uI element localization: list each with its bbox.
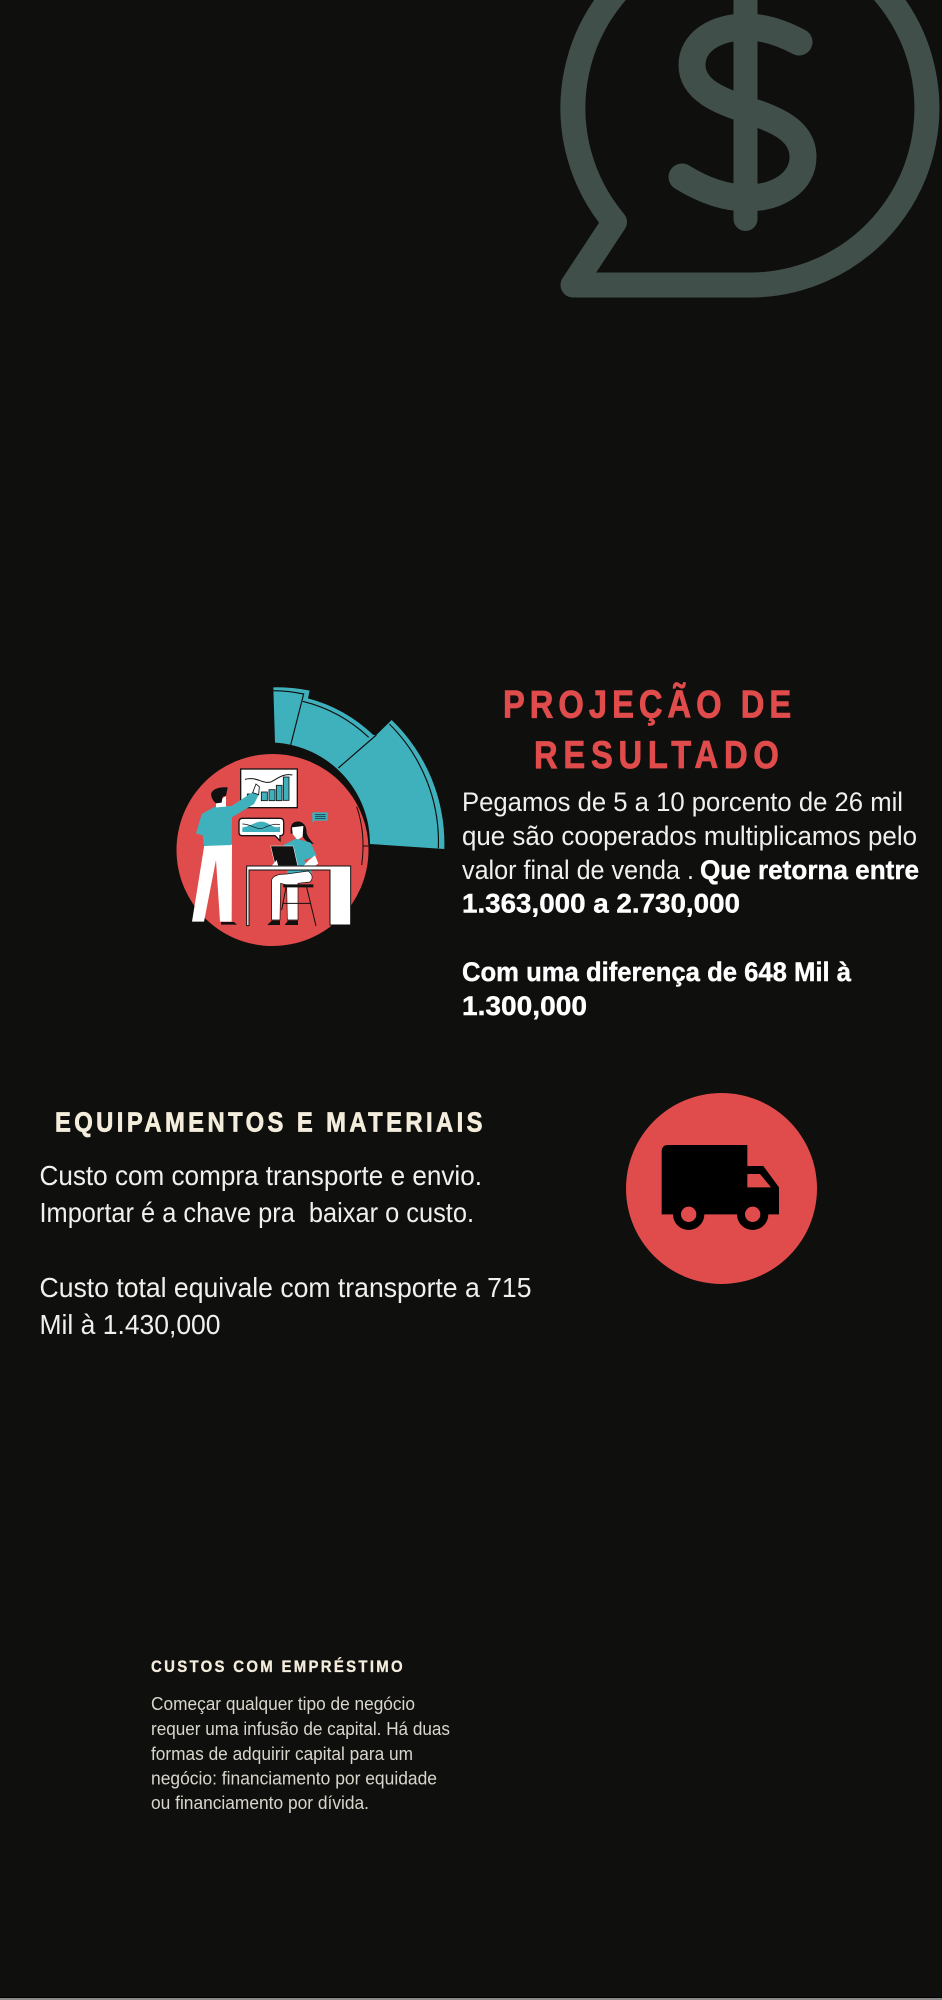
text block: equipment costs: Mil à 1.430,000: [40, 1309, 220, 1340]
chart panel: [241, 769, 297, 808]
text block: projeção description: Com uma diferença de 648 Mil à: [462, 957, 852, 987]
text block: loan costs: formas de adquirir capital para um: [151, 1744, 413, 1764]
icon: speech bubble with dollar sign: [573, 0, 927, 285]
text block: loan costs: Começar qualquer tipo de negócio: [151, 1694, 415, 1714]
text block: equipment costs: Custo total equivale com transporte a 715: [40, 1272, 532, 1303]
speech bubble chart: [239, 818, 284, 841]
people and desk: [192, 769, 368, 926]
text block: equipment costs: Importar é a chave pra baixar o custo.: [40, 1197, 474, 1228]
text block: projeção description: Pegamos de 5 a 10 porcento de 26 mil: [462, 787, 903, 817]
woman: [267, 822, 318, 926]
heading: projeção de resultado: RESULTADO: [534, 734, 779, 777]
text block: loan costs: ou financiamento por dívida.: [151, 1793, 369, 1813]
heading: custos com empréstimo: CUSTOS COM EMPRÉSTIMO: [151, 1656, 403, 1676]
heading: equipamentos e materiais: EQUIPAMENTOS E MATERIAIS: [55, 1106, 483, 1138]
text block: projeção description: valor final de venda .: [462, 855, 694, 885]
icon: delivery truck in red circle: [626, 1093, 817, 1284]
text block: loan costs: [151, 1694, 450, 1813]
heading: projeção de resultado: PROJEÇÃO DE: [503, 683, 791, 726]
teal fan chart: [273, 687, 444, 849]
man: [192, 784, 259, 925]
text block: equipment costs: [40, 1160, 532, 1340]
text block: projeção description: [462, 787, 919, 1021]
text block: loan costs: requer uma infusão de capital. Há duas: [151, 1719, 450, 1739]
text block: projeção description: 1.363,000 a 2.730,000: [462, 888, 740, 918]
red circle: [176, 754, 368, 946]
text block: loan costs: negócio: financiamento por equidade: [151, 1768, 437, 1788]
text block: equipment costs: Custo com compra transporte e envio.: [40, 1160, 482, 1191]
small teal message: [312, 812, 328, 823]
text block: projeção description: 1.300,000: [462, 991, 587, 1021]
heading: projeção de resultado: [503, 683, 791, 777]
illustration: team analysing results: [176, 687, 444, 946]
text block: projeção description: que são cooperados multiplicamos pelo: [462, 821, 917, 851]
text block: projeção description: Que retorna entre: [700, 855, 919, 885]
desk: [247, 866, 351, 926]
